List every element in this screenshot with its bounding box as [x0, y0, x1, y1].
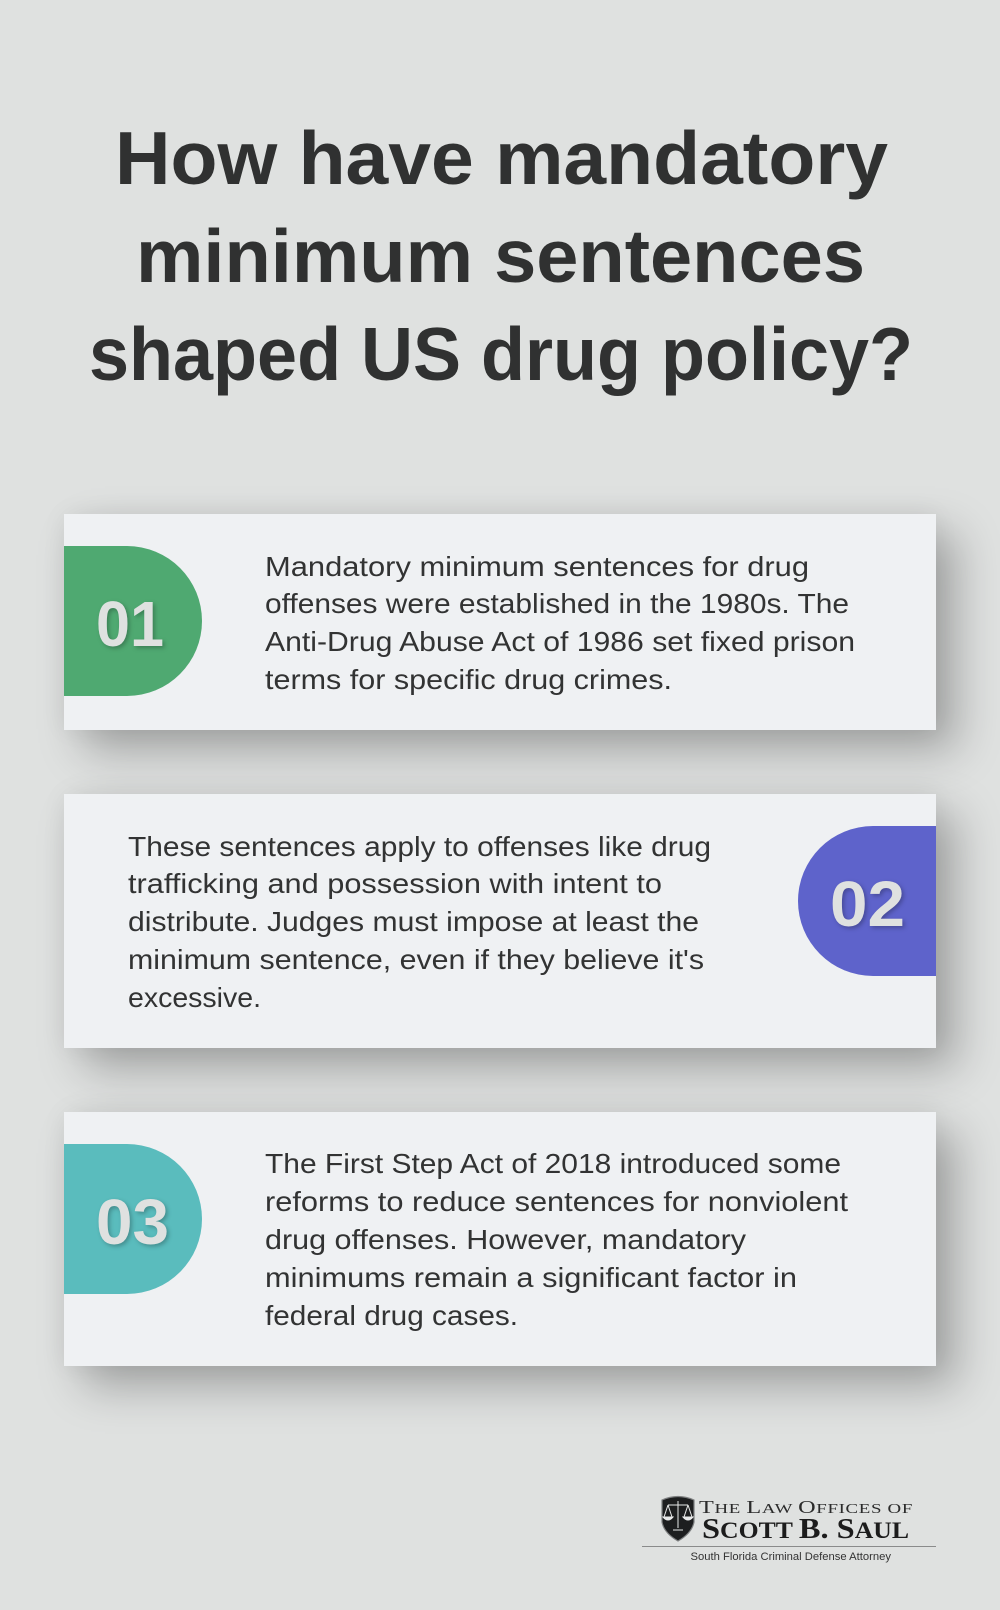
badge: 03: 03 [96, 1186, 169, 1258]
text: step 02 description: minimum sentence, even if they believe it's [128, 944, 704, 975]
icon: shield with scales [662, 1496, 694, 1541]
text: step 02 description: excessive. [128, 982, 261, 1013]
text: step 01 description: terms for specific drug crimes. [265, 664, 672, 695]
badge: 01: 01 [96, 588, 164, 660]
text: step 01 description: Anti-Drug Abuse Act of 1986 set fixed prison [265, 626, 855, 657]
badge: 03 [64, 1144, 202, 1294]
text: step 02 description: These sentences apply to offenses like drug [128, 831, 711, 862]
text: step 02 description: distribute. Judges must impose at least the [128, 906, 699, 937]
badge: 02 [798, 826, 936, 976]
logo text: The Law Offices of: T HE L AW O FFICES OF [699, 1497, 913, 1517]
text: step 02 description: trafficking and possession with intent to [128, 868, 662, 899]
logo text: Scott B. Saul: SCOTT B. S AUL [702, 1513, 909, 1545]
text: step 03 description: The First Step Act of 2018 introduced some [265, 1148, 841, 1179]
text: step 03 description: reforms to reduce sentences for nonviolent [265, 1186, 848, 1217]
title [89, 116, 913, 396]
text: step 03 description: federal drug cases. [265, 1300, 518, 1331]
logo tagline: South Florida Criminal Defense Attorney [690, 1551, 892, 1563]
title: shaped US drug policy? [89, 312, 913, 396]
text: step 01 description [265, 551, 855, 695]
text: step 03 description [265, 1148, 848, 1331]
text: step 03 description: minimums remain a significant factor in [265, 1262, 797, 1293]
text: step 03 description: drug offenses. However, mandatory [265, 1224, 746, 1255]
text: step 01 description: offenses were established in the 1980s. The [265, 588, 849, 619]
panel: step 01 [64, 514, 936, 730]
text: step 02 description [128, 831, 711, 1013]
title: minimum sentences [136, 214, 865, 298]
panel: step 02 [64, 794, 936, 1048]
badge: 02: 02 [830, 868, 905, 940]
title: How have mandatory [115, 116, 888, 200]
badge: 01 [64, 546, 202, 696]
text: step 01 description: Mandatory minimum sentences for drug [265, 551, 809, 582]
panel: step 03 [64, 1112, 936, 1366]
